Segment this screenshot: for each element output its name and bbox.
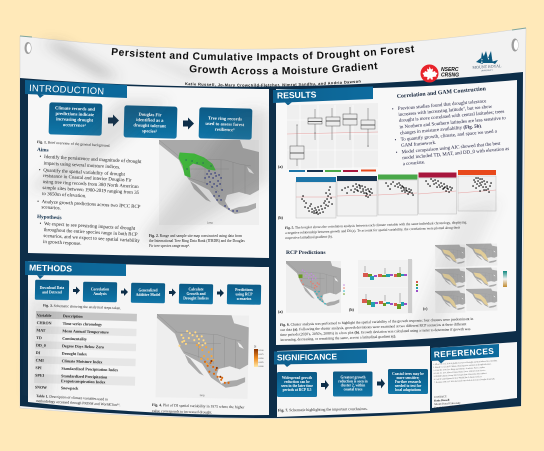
table: climate variables: Continentality <box>62 336 87 341</box>
table: climate variables: Description <box>63 313 83 319</box>
flow: background boxes: used to assess forest <box>205 121 245 127</box>
flow: background boxes: Tree ring records <box>208 115 242 122</box>
text block: correlation and GAM construction: Correlation and GAM Construction <box>397 86 487 100</box>
flow: conclusions: reduction can be <box>284 380 310 384</box>
text block: correlation and GAM construction: GAM framework. <box>401 141 437 149</box>
text block: aims and hypothesis: resistance in Coastal and interior Douglas Fir <box>43 174 132 184</box>
title: Growth Across a Moisture Gradient <box>190 62 378 74</box>
caption: fig 2: the International Tree Ring Data Bank (ITRDB) and the Douglas <box>149 239 245 243</box>
caption: fig 6: time periods (2020's, 2050's, 2080's) in a box plot (b). Growth deviation was calculated using a raster to determine if growth was <box>280 327 470 337</box>
legend: drought index color bar: 0.075 <box>258 354 264 356</box>
text block: reference list <box>433 359 499 384</box>
title: Persistent and Cumulative Impacts of Drought on Forest <box>112 46 414 62</box>
chart: cluster analysis map <box>286 261 341 313</box>
flow: background boxes <box>49 102 252 140</box>
logos <box>420 51 502 82</box>
text block: aims and hypothesis: • <box>39 222 42 227</box>
text block: aims and hypothesis: in growth response. <box>43 240 82 247</box>
caption: fig 5: a negative relationship between growth and DI (a). To account for spatial variability, the correlations were plotted along their <box>285 225 461 236</box>
text block: aims and hypothesis: Hypothesis <box>37 214 62 221</box>
scatter panel: SPEI <box>418 172 456 214</box>
flow: background boxes: predictions indicate <box>55 111 94 117</box>
table: climate variables <box>34 311 137 392</box>
legend: drought index color bar: 0.000 <box>258 366 264 368</box>
label (b): (b) <box>349 307 355 312</box>
panel: references <box>431 342 517 409</box>
flow: conclusions: Coastal trees may be <box>392 372 424 376</box>
label (c): (c) <box>423 306 428 311</box>
flow: analysis steps: Additive Model <box>136 293 160 297</box>
text block: correlation and GAM construction: • <box>394 138 397 143</box>
heading: methods ribbon: METHODS <box>29 263 72 274</box>
table: climate variables: SNOW <box>35 384 47 390</box>
text block: reference list: 1. Allen CD et al. 2010 A global overview of drought and heat-induced tree mortality. <box>433 359 498 366</box>
text block: contact: Katie Russell <box>434 399 450 402</box>
table: climate variables: Standardized Precipitation Index <box>61 366 118 372</box>
text block: aims and hypothesis: impacts using several moisture indices. <box>44 161 120 171</box>
legend swatches <box>289 170 376 172</box>
flow: analysis steps: Correlation <box>91 288 109 292</box>
text block: aims and hypothesis: • <box>39 168 41 173</box>
heading: introduction ribbon: INTRODUCTION <box>29 82 104 96</box>
logo: NSERC <box>420 64 459 82</box>
scatter panel: SNOW <box>458 170 496 211</box>
table: climate variables: Evapotranspiration Index <box>61 378 105 384</box>
flow: background boxes: resilience³ <box>215 127 235 132</box>
panel: introduction <box>25 80 269 258</box>
caption: fig 2: Fig. 2. Range and sample site map constructed using data from <box>149 234 242 238</box>
arrow <box>108 114 119 126</box>
caption: table 1: methodology accessed through PRISM and WorldClim⁵⁶. <box>36 399 121 407</box>
legend: drought index color bar: 0.025 <box>258 362 264 364</box>
caption: fig 4: value corresponds to increased drought. <box>152 409 212 415</box>
flow: analysis steps: Predictions <box>235 288 253 292</box>
flow: analysis steps <box>35 280 261 305</box>
text block: aims and hypothesis: Aims <box>37 147 49 154</box>
text block: correlation and GAM construction: To quantify growth, climate, and space we used a <box>400 129 498 143</box>
legend: drought index color bar: DI <box>254 346 257 348</box>
flow: analysis steps: Generalized <box>138 288 158 292</box>
text block: correlation and GAM construction: a covariate. <box>403 160 425 167</box>
flow: conclusions: cluster 2, within <box>341 384 365 388</box>
flow: analysis steps: Drought Indices <box>183 296 209 300</box>
arrow <box>183 118 194 130</box>
flow: conclusions <box>277 369 428 397</box>
logo: Mount Royal University: UNIVERSITY <box>481 70 494 72</box>
chart: latitudinal scatter panels <box>278 170 496 220</box>
table: climate variables: DI <box>36 350 41 355</box>
chart: range and sample site map <box>159 140 259 225</box>
heading: introduction ribbon <box>25 80 127 98</box>
flow: background boxes: drought tolerant <box>133 122 166 129</box>
caption: table 1: Table 1. Description of climate variables used in <box>36 394 108 402</box>
logo: NSERC: CRSNG <box>441 72 459 78</box>
flow: analysis steps: Growth and <box>186 292 206 296</box>
table: climate variables: Standardized Precipitation <box>61 373 108 380</box>
text block: contact <box>434 394 465 409</box>
table: climate variables: CHRON <box>37 320 52 325</box>
chart: correlation boxplot: (a) <box>278 164 283 169</box>
text block: reference list: 6. Fick SE and Hijmans RJ 2017 WorldClim 2 climate surfaces. <box>434 375 483 381</box>
label (a): (a) <box>278 309 283 314</box>
navy poster body <box>20 72 523 418</box>
caption: fig 6: our data (a). Following the cluster analysis, growth deviations were examined at two different RCP scenarios at three different <box>280 322 466 332</box>
grommet: right <box>512 38 518 52</box>
grommet: left <box>24 42 32 54</box>
caption: fig 6: increasing, decreasing, or remaining the same, across a latitudinal gradient (c). <box>280 334 396 342</box>
text block: aims and hypothesis: throughout the entire species range in both RCP <box>44 228 138 238</box>
legend: cluster <box>343 284 345 295</box>
flow: analysis steps: Download Data <box>40 286 64 290</box>
scatter panel: DI <box>296 177 336 218</box>
logo: NSERC: NSERC <box>441 67 459 73</box>
text block: reference list: 2. Bansal S et al. 2015 Climate-related genetic variation in drought tolerance. <box>433 362 492 369</box>
text block: aims and hypothesis: sample sites between 1900-2019 ranging from 35 <box>42 186 140 196</box>
chart: growth deviation box plot <box>358 259 418 314</box>
text block: correlation and GAM construction: • <box>396 151 398 156</box>
flow: analysis steps: Calculate <box>189 288 204 292</box>
caption: fig 6: Fig. 6. Cluster analysis was performed to highlight the spatial variability of the growth response; four clusters were predominant in <box>280 317 473 327</box>
authors: Katie Russell, Jo-Mary Crowchild-Fletcher, Nimrat Sandhu, and Andria Dawson <box>185 80 361 88</box>
text block: aims and hypothesis: We expect to see persisting impacts of drought <box>44 222 136 232</box>
chart: drought index spatial map <box>156 314 249 399</box>
flow: analysis steps: and Detrend <box>42 290 63 294</box>
flow: background boxes: identified as a <box>136 117 164 123</box>
text block: aims and hypothesis: Identify the persistence and magnitude of drought <box>44 155 142 165</box>
scatter panel: SPI <box>378 174 418 215</box>
text block: aims and hypothesis: Quantify the spatial variability of drought <box>43 168 126 178</box>
text block: correlation and GAM construction: changes in moisture availability (Fig. 5b). <box>400 124 482 136</box>
legend: drought index color bar: 0.050 <box>258 358 264 360</box>
logo: Mount Royal University: MOUNT ROYAL <box>472 63 502 70</box>
caption: fig 2: Fir tree species range map⁴. <box>149 244 190 248</box>
text block: reference list: 3. Fritts HC 1976 Tree Rings and Climate. Academic Press, London. <box>433 366 486 372</box>
flow: background boxes: increasing drought <box>56 116 94 123</box>
arrow <box>73 286 80 294</box>
text block: aims and hypothesis: scenarios. <box>41 205 61 211</box>
chart: drought index spatial map: long <box>200 393 205 397</box>
scatter panel: CMI <box>337 176 377 216</box>
table: climate variables: SPI <box>35 365 42 370</box>
text block: aims and hypothesis: • <box>37 200 39 205</box>
flow: conclusions: seen in the later time <box>281 384 313 388</box>
caption: fig 1: Fig. 1. Brief overview of the general background. <box>37 140 110 148</box>
table: climate variables: Drought Index <box>62 351 87 356</box>
flow: conclusions: Further research <box>395 380 421 384</box>
logo: Mount Royal University <box>472 51 502 72</box>
flow: conclusions: Widespread growth <box>282 376 312 380</box>
text block: correlation and GAM construction: Previous studies found that drought tolerance <box>398 99 487 112</box>
text block: aims and hypothesis: scenarios, and we expect to see spatial variability <box>43 234 140 244</box>
panel: methods <box>25 261 269 415</box>
chart: correlation boxplot <box>278 103 378 172</box>
legend <box>416 281 418 292</box>
text block: reference list: 5. PRISM Climate Group 2019 Oregon State University data explorer. <box>434 372 487 378</box>
chart: latitudinal scatter panels: (b) <box>278 215 284 220</box>
heading: significance ribbon <box>274 350 367 367</box>
caption: fig 5: respective latitudinal gradient (b). <box>285 235 333 240</box>
text block: aims and hypothesis <box>37 147 143 250</box>
heading: RCP predictions: RCP Predictions <box>286 250 326 256</box>
text block: correlation and GAM construction: drought is more correlated with central latitudes; trees <box>399 110 505 124</box>
text block: reference list: 7. Restaino CM et al. 2016 Increased water deficit decreases Douglas fir growth. <box>434 377 496 384</box>
table: climate variables: Snowpack <box>61 385 79 391</box>
arrow <box>377 378 385 388</box>
table: climate variables: Mean Annual Temperature <box>62 328 109 335</box>
heading: significance ribbon: SIGNIFICANCE <box>277 351 337 362</box>
heading: references ribbon: REFERENCES <box>434 346 494 359</box>
text block: aims and hypothesis: Analyze growth predictions across two IPCC RCP <box>42 200 141 210</box>
heading: results ribbon: RESULTS <box>277 89 317 100</box>
text block: correlation and GAM construction <box>392 86 510 168</box>
flow: background boxes: Climate records and <box>55 105 96 112</box>
flow: analysis steps: using RCP <box>236 292 253 296</box>
legend: drought index color bar <box>254 346 264 368</box>
text block: correlation and GAM construction: in Northern and Southern latitudes are less sensitive to <box>399 116 507 130</box>
flow: conclusions: local adaptations <box>395 388 422 392</box>
text block: reference list: 4. Little EL 1971 Atlas of United States Trees. USDA Forest Service. <box>433 369 486 375</box>
flow: background boxes: Douglas Fir <box>138 112 162 117</box>
caption: fig 7: Fig. 7. Schematic highlighting the important conclusions. <box>278 407 368 412</box>
chart: range and sample site map: Long <box>207 222 213 224</box>
text block: correlation and GAM construction: Model comparison using AIC showed that the best <box>402 142 501 155</box>
flow: analysis steps: scenarios <box>237 297 252 301</box>
flow: conclusions: more sensitive; <box>396 376 420 380</box>
chart: future growth deviation maps <box>435 243 507 313</box>
flow: conclusions: coastal trees <box>344 388 363 392</box>
text block: contact: Email: krussell@mtroyal.ca <box>434 405 465 409</box>
table: climate variables: Degree Days Below Zero <box>62 343 104 349</box>
flow: conclusions: Greatest growth <box>341 376 365 380</box>
arrow <box>169 288 176 296</box>
flow: background boxes: occurrence¹ <box>63 122 87 128</box>
text block: contact: CONTACT: <box>434 395 447 399</box>
text block: correlation and GAM construction: model included TD, MAT, and DD_0 with elevation as <box>402 147 510 161</box>
flow: conclusions: reduction is seen in <box>338 380 368 384</box>
table: climate variables: DD_0 <box>36 343 46 348</box>
table: climate variables: SPEI <box>35 373 45 378</box>
caption: fig 3: Fig. 3. Schematic showing the analytical steps taken. <box>43 304 121 310</box>
caption: fig 5: Fig. 5. The boxplot shows the correlation analysis between each climate variable with the same individual chronology, displaying <box>285 220 466 230</box>
table: climate variables: TD <box>36 335 42 340</box>
text block: aims and hypothesis: using tree ring records from 380 North American <box>43 180 139 190</box>
heading: results ribbon <box>273 86 373 106</box>
caption: fig 4: Fig. 4. Plot of DI spatial variability in 1975 where the higher <box>152 403 245 409</box>
table: climate variables: Time series chronology <box>63 321 102 327</box>
legend: deviation colour bar <box>503 271 507 287</box>
arrow <box>321 380 329 390</box>
flow: conclusions: periods at RCP 8.5 <box>283 388 312 392</box>
flow: background boxes: species² <box>142 128 158 134</box>
panel: results <box>273 80 517 345</box>
arrow <box>217 289 224 297</box>
panel: significance <box>274 346 430 417</box>
text block: aims and hypothesis: • <box>39 155 42 160</box>
legend: drought index color bar: 0.100 <box>258 350 264 352</box>
table: climate variables: CMI <box>36 358 44 363</box>
text block: contact: Mount Royal University <box>434 402 461 406</box>
arrow <box>121 288 128 296</box>
text block: correlation and GAM construction: increases with increasing latitude⁷, but we show <box>398 104 493 118</box>
table: climate variables: MAT <box>36 328 46 333</box>
table: climate variables: Variable <box>37 313 52 318</box>
flow: conclusions: needed to test for <box>395 384 422 388</box>
heading: methods ribbon <box>25 261 126 279</box>
table: climate variables: Climate Moisture Index <box>62 358 102 364</box>
flow: analysis steps: Analysis <box>93 292 107 296</box>
text block: aims and hypothesis: to 3650m of elevation. <box>42 192 86 199</box>
text block: correlation and GAM construction: • <box>392 107 394 113</box>
title <box>112 46 414 88</box>
